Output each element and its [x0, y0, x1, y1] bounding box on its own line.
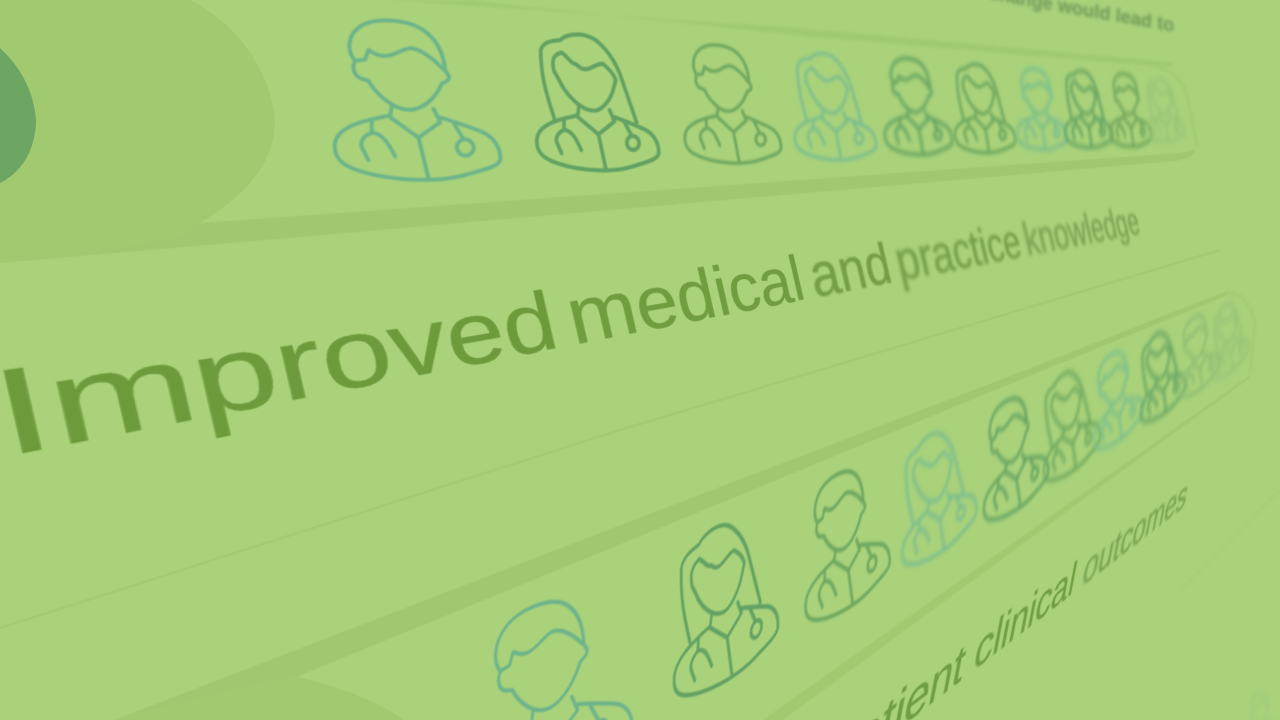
panel: lower row card	[0, 250, 1280, 720]
icon: female doctor 2 lower	[673, 489, 783, 711]
heading: patient clinical outcomes: clinical	[970, 551, 1081, 684]
icon: female doctor 6	[955, 63, 1015, 154]
icon: male doctor 3	[685, 43, 781, 166]
faint divider line lower right	[1180, 490, 1280, 590]
lower row bottom edge line	[760, 375, 1250, 720]
heading: patient clinical outcomes: outcomes	[1079, 470, 1192, 597]
icon: female doctor 2	[537, 32, 659, 173]
icon: male doctor 9 lower	[1180, 300, 1220, 404]
icon: female doctor 10	[1147, 78, 1185, 142]
icon: female doctor 4	[795, 52, 876, 162]
thin divider line under heading	[0, 250, 1220, 628]
heading: improved medical and practice knowledge: knowledge	[1018, 199, 1143, 266]
icon: female doctor 4 lower	[902, 405, 978, 577]
panel: left large blob	[0, 0, 275, 263]
icon: male doctor 1	[335, 19, 500, 183]
lower row top edge band	[114, 291, 1228, 720]
icon: male doctor 5 lower	[984, 374, 1048, 531]
lower row of doctor icons	[478, 288, 1278, 720]
lower row far rounded end	[1227, 293, 1255, 373]
heading: patient clinical outcomes	[818, 470, 1192, 720]
row one top edge band	[385, 0, 1172, 68]
icon: female doctor 8 lower	[1141, 315, 1186, 429]
row one bottom edge band	[0, 150, 1195, 263]
heading: improved medical and practice knowledge: medical	[558, 243, 810, 362]
icon: female doctor 6 lower	[1044, 350, 1100, 490]
panel: upper row card	[0, 0, 1197, 263]
icon: dark teal circle	[0, 48, 36, 183]
heading: improved medical and practice knowledge	[0, 199, 1143, 483]
icon: male doctor 7	[1017, 68, 1067, 150]
heading: improved medical and practice knowledge: practice	[889, 215, 1026, 293]
upper row of doctor icons	[335, 19, 1185, 183]
icon: male doctor 9	[1110, 73, 1152, 148]
icon: male doctor 3 lower	[805, 442, 892, 633]
icon: male doctor 5	[885, 57, 952, 156]
icon: faint doctor bottom right	[1248, 680, 1278, 720]
icon: male doctor 1 lower	[478, 563, 636, 720]
icon: male doctor 7 lower	[1094, 333, 1144, 457]
bottom left blob	[114, 677, 404, 720]
icon: female doctor 10 lower	[1213, 288, 1249, 385]
row one far rounded end	[1150, 66, 1197, 146]
icon: female doctor 8	[1065, 70, 1113, 148]
heading: improved medical and practice knowledge: and	[802, 232, 897, 311]
